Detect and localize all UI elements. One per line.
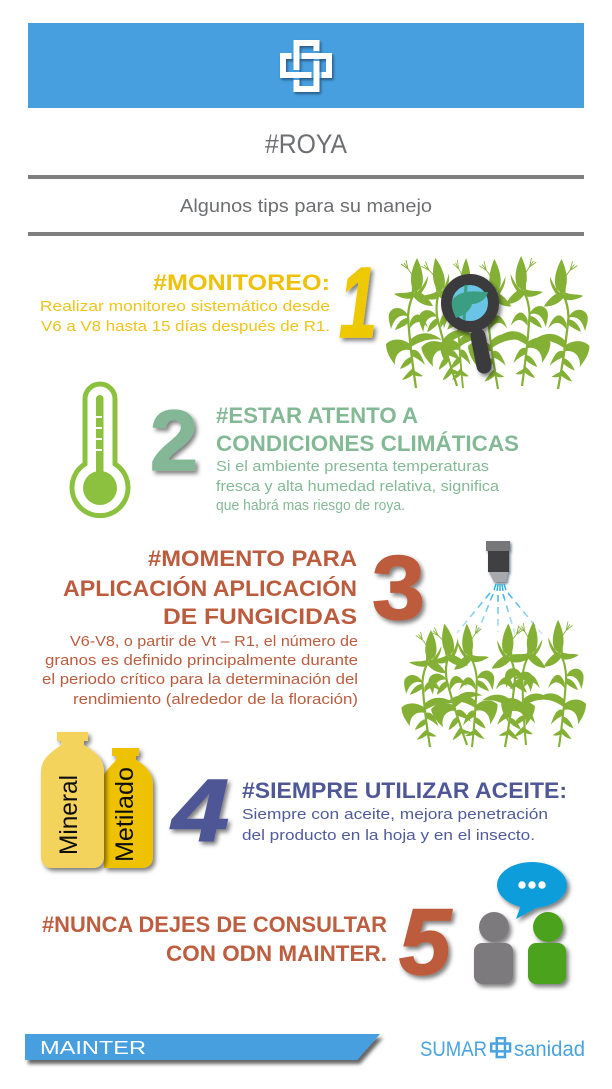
subtitle with rules: Algunos tips para su manejo xyxy=(180,196,432,216)
text: condiciones body: Si el ambiente presenta temperaturas xyxy=(216,458,489,475)
text: monitoreo body: V6 a V8 hasta 15 días después de R1. xyxy=(41,318,330,335)
heading: momento: APLICACIÓN APLICACIÓN xyxy=(63,576,357,601)
number 4: 4 xyxy=(170,761,229,860)
panel: condiciones climaticas xyxy=(72,384,519,516)
number 1: 1 xyxy=(339,247,377,359)
panel: consultar xyxy=(42,862,567,994)
footer ribbon: mainter: MAINTER xyxy=(40,1038,146,1058)
text: monitoreo body xyxy=(40,298,330,335)
heading: condiciones: CONDICIONES CLIMÁTICAS xyxy=(216,431,519,456)
icon: small logo xyxy=(491,1038,510,1057)
heading: momento: DE FUNGICIDAS xyxy=(163,604,357,629)
text: condiciones body xyxy=(216,458,500,514)
heading: consultar xyxy=(42,912,387,966)
icon: thermometer xyxy=(72,384,128,516)
title: #ROYA xyxy=(265,129,347,159)
illustration: corn field xyxy=(402,619,586,750)
header banner xyxy=(28,23,584,108)
illustration: corn field with magnifier xyxy=(386,254,593,391)
text: momento body: V6-V8, o partir de Vt – R1, el número de xyxy=(70,633,358,650)
text: aceite body: del producto en la hoja y en el insecto. xyxy=(242,827,535,844)
icon: bottles xyxy=(41,732,153,868)
heading: monitoreo: #MONITOREO: xyxy=(153,270,330,295)
icon: people talking xyxy=(474,862,567,984)
number 3: 3 xyxy=(372,538,425,639)
heading: momento: #MOMENTO PARA xyxy=(148,546,357,571)
text: condiciones body: que habrá mas riesgo de roya. xyxy=(216,497,405,514)
panel: monitoreo xyxy=(40,247,593,391)
text: aceite body xyxy=(242,806,548,844)
icon: magnifier xyxy=(446,280,494,366)
panel: siempre utilizar aceite xyxy=(41,732,567,868)
text: monitoreo body: Realizar monitoreo sistemático desde xyxy=(40,298,330,315)
icon: sprayer nozzle xyxy=(457,541,542,634)
heading: consultar: CON ODN MAINTER. xyxy=(166,941,387,966)
number 2: 2 xyxy=(150,394,198,489)
heading: aceite: #SIEMPRE UTILIZAR ACEITE: xyxy=(242,778,567,803)
text: momento body: granos es definido principalmente durante xyxy=(45,652,358,669)
panel: momento de aplicacion xyxy=(42,538,586,750)
text: momento body: el periodo crítico para la determinación del xyxy=(42,671,358,688)
subtitle with rules xyxy=(28,175,584,236)
text: aceite body: Siempre con aceite, mejora penetración xyxy=(242,806,548,823)
footer brand: sumar sanidad: SUMAR xyxy=(420,1038,487,1061)
heading: condiciones: #ESTAR ATENTO A xyxy=(216,403,418,428)
text: condiciones body: fresca y alta humedad relativa, significa xyxy=(216,478,500,495)
number 5: 5 xyxy=(399,889,453,994)
heading: momento xyxy=(63,546,357,629)
heading: condiciones xyxy=(216,403,519,456)
text: momento body: rendimiento (alrededor de la floración) xyxy=(73,691,358,708)
footer brand: sumar sanidad: sanidad xyxy=(514,1038,585,1061)
bottle: mineral: Mineral xyxy=(55,775,83,855)
bottle: metilado: Metilado xyxy=(111,767,139,862)
speech bubble xyxy=(497,862,567,919)
icon: sumar logo xyxy=(283,43,329,89)
footer brand: sumar sanidad xyxy=(420,1038,585,1061)
text: momento body xyxy=(42,633,358,708)
footer ribbon: mainter xyxy=(25,1034,380,1060)
heading: consultar: #NUNCA DEJES DE CONSULTAR xyxy=(42,912,387,937)
